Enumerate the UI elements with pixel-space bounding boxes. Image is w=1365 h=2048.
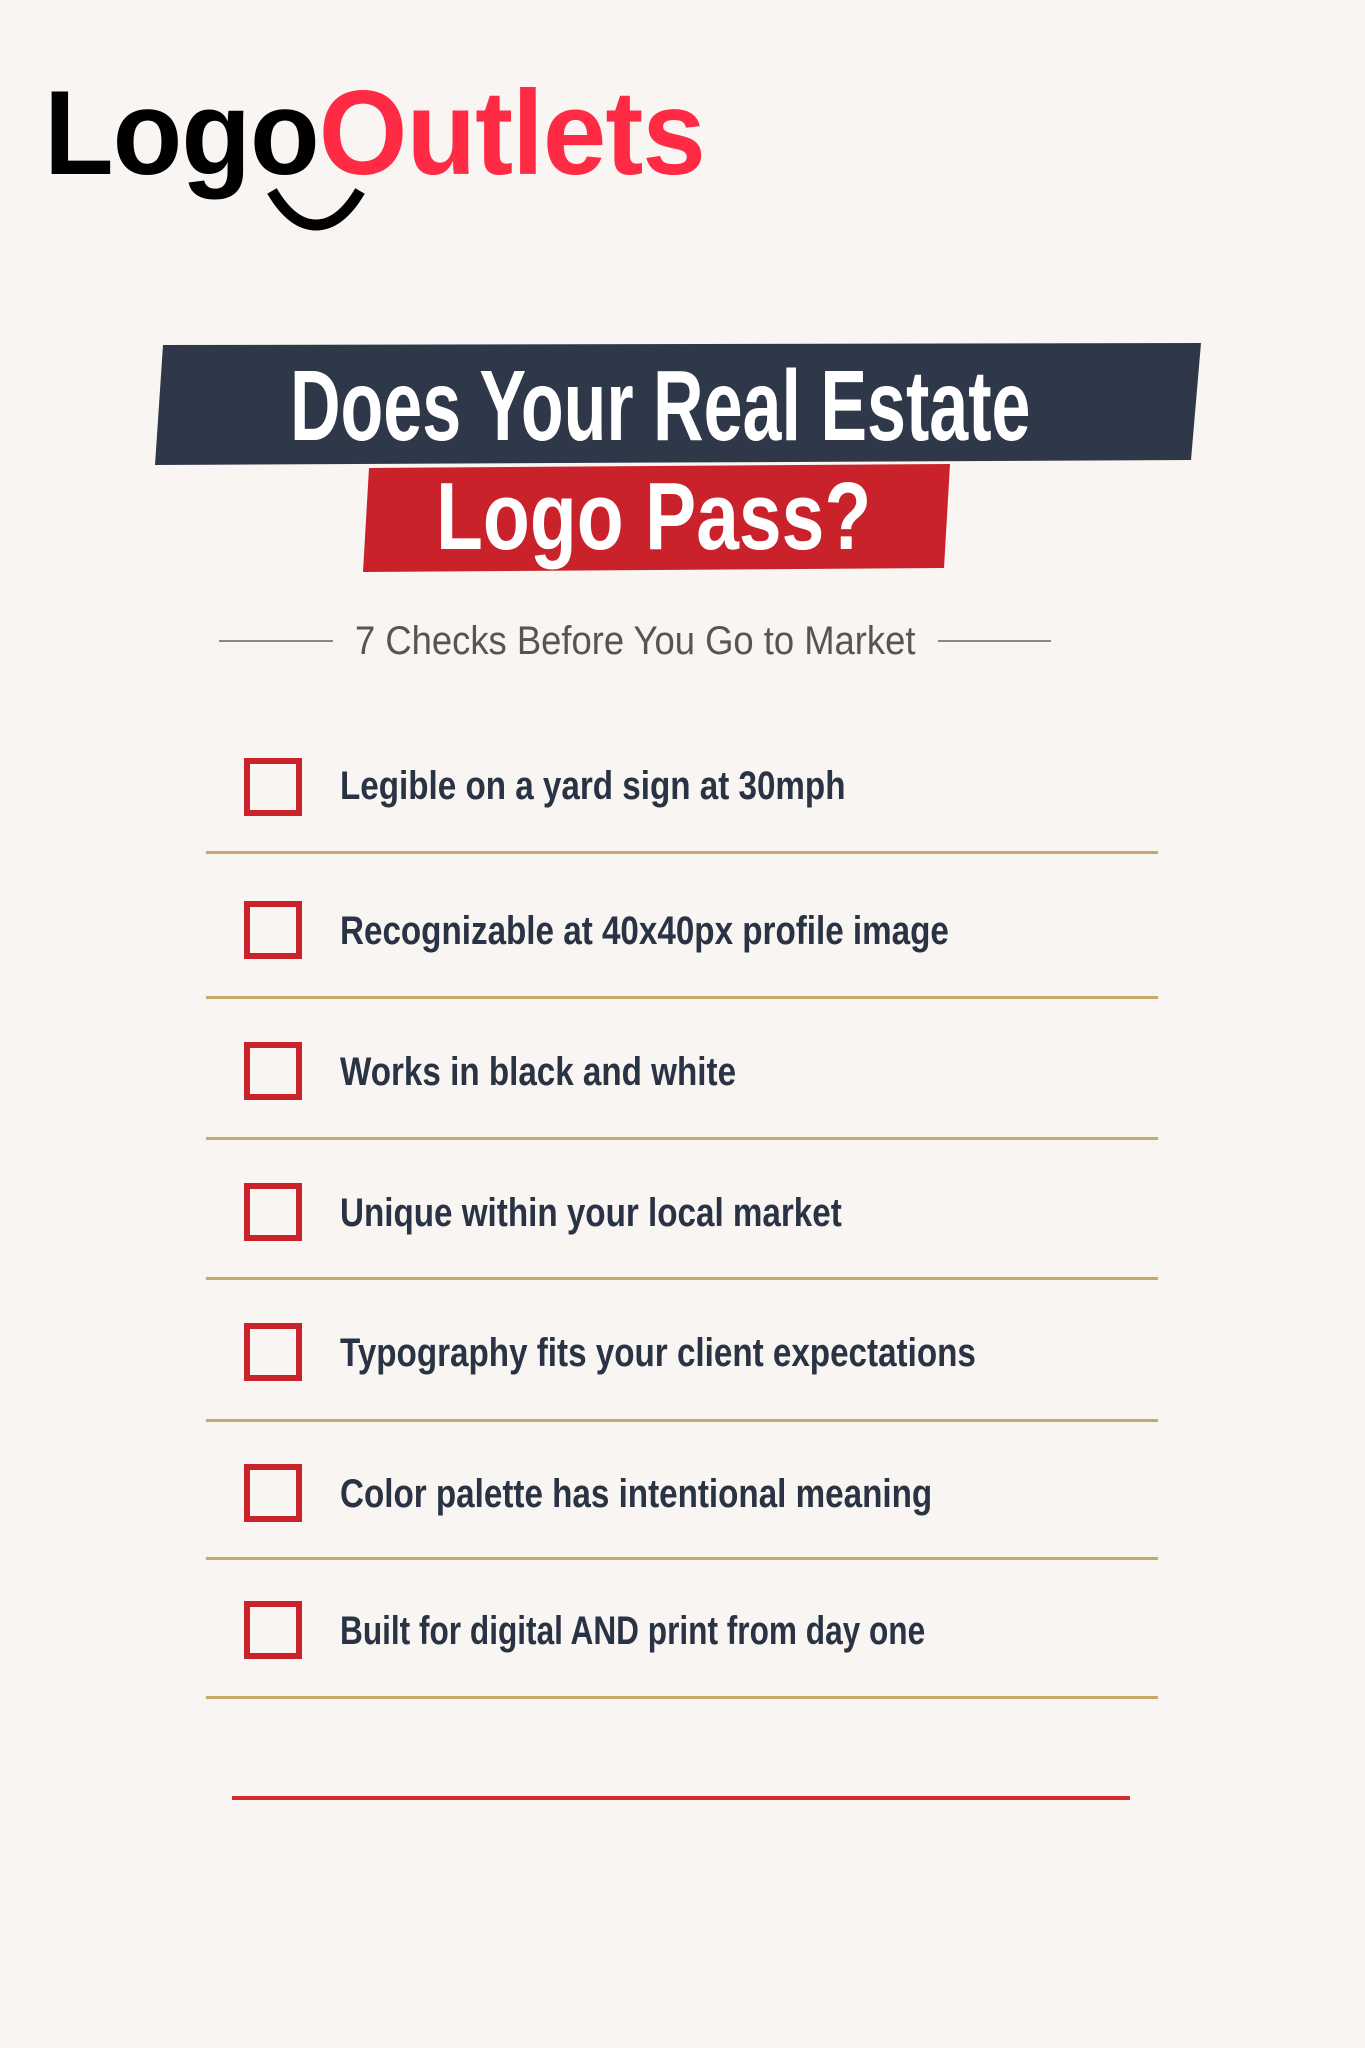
item 1: Legible on a yard sign at 30mph [340,764,845,808]
item 4: Unique within your local market [340,1191,842,1235]
item 5: Typography fits your client expectations [340,1331,976,1375]
title banner: dark: Does Your Real Estate [290,350,1030,462]
item 4 [206,1183,1158,1280]
item 1 [206,758,1158,854]
item 2 [206,901,1158,999]
item 7: Built for digital AND print from day one [340,1609,925,1653]
red rule [232,1796,1130,1800]
item 6 [206,1464,1158,1560]
checklist [206,758,1158,1699]
item 3: Works in black and white [340,1050,736,1094]
logo: LogoOutlets: LogoOutlets [44,66,705,200]
item 3 [206,1042,1158,1140]
title banner: red: Logo Pass? [436,463,871,570]
item 6: Color palette has intentional meaning [340,1472,932,1516]
icon: smile [267,188,365,230]
item 7 [206,1601,1158,1699]
item 2: Recognizable at 40x40px profile image [340,909,949,953]
subtitle: 7 Checks Before You Go to Market [355,619,915,663]
item 5 [206,1323,1158,1422]
title banner: dark [155,343,1201,465]
